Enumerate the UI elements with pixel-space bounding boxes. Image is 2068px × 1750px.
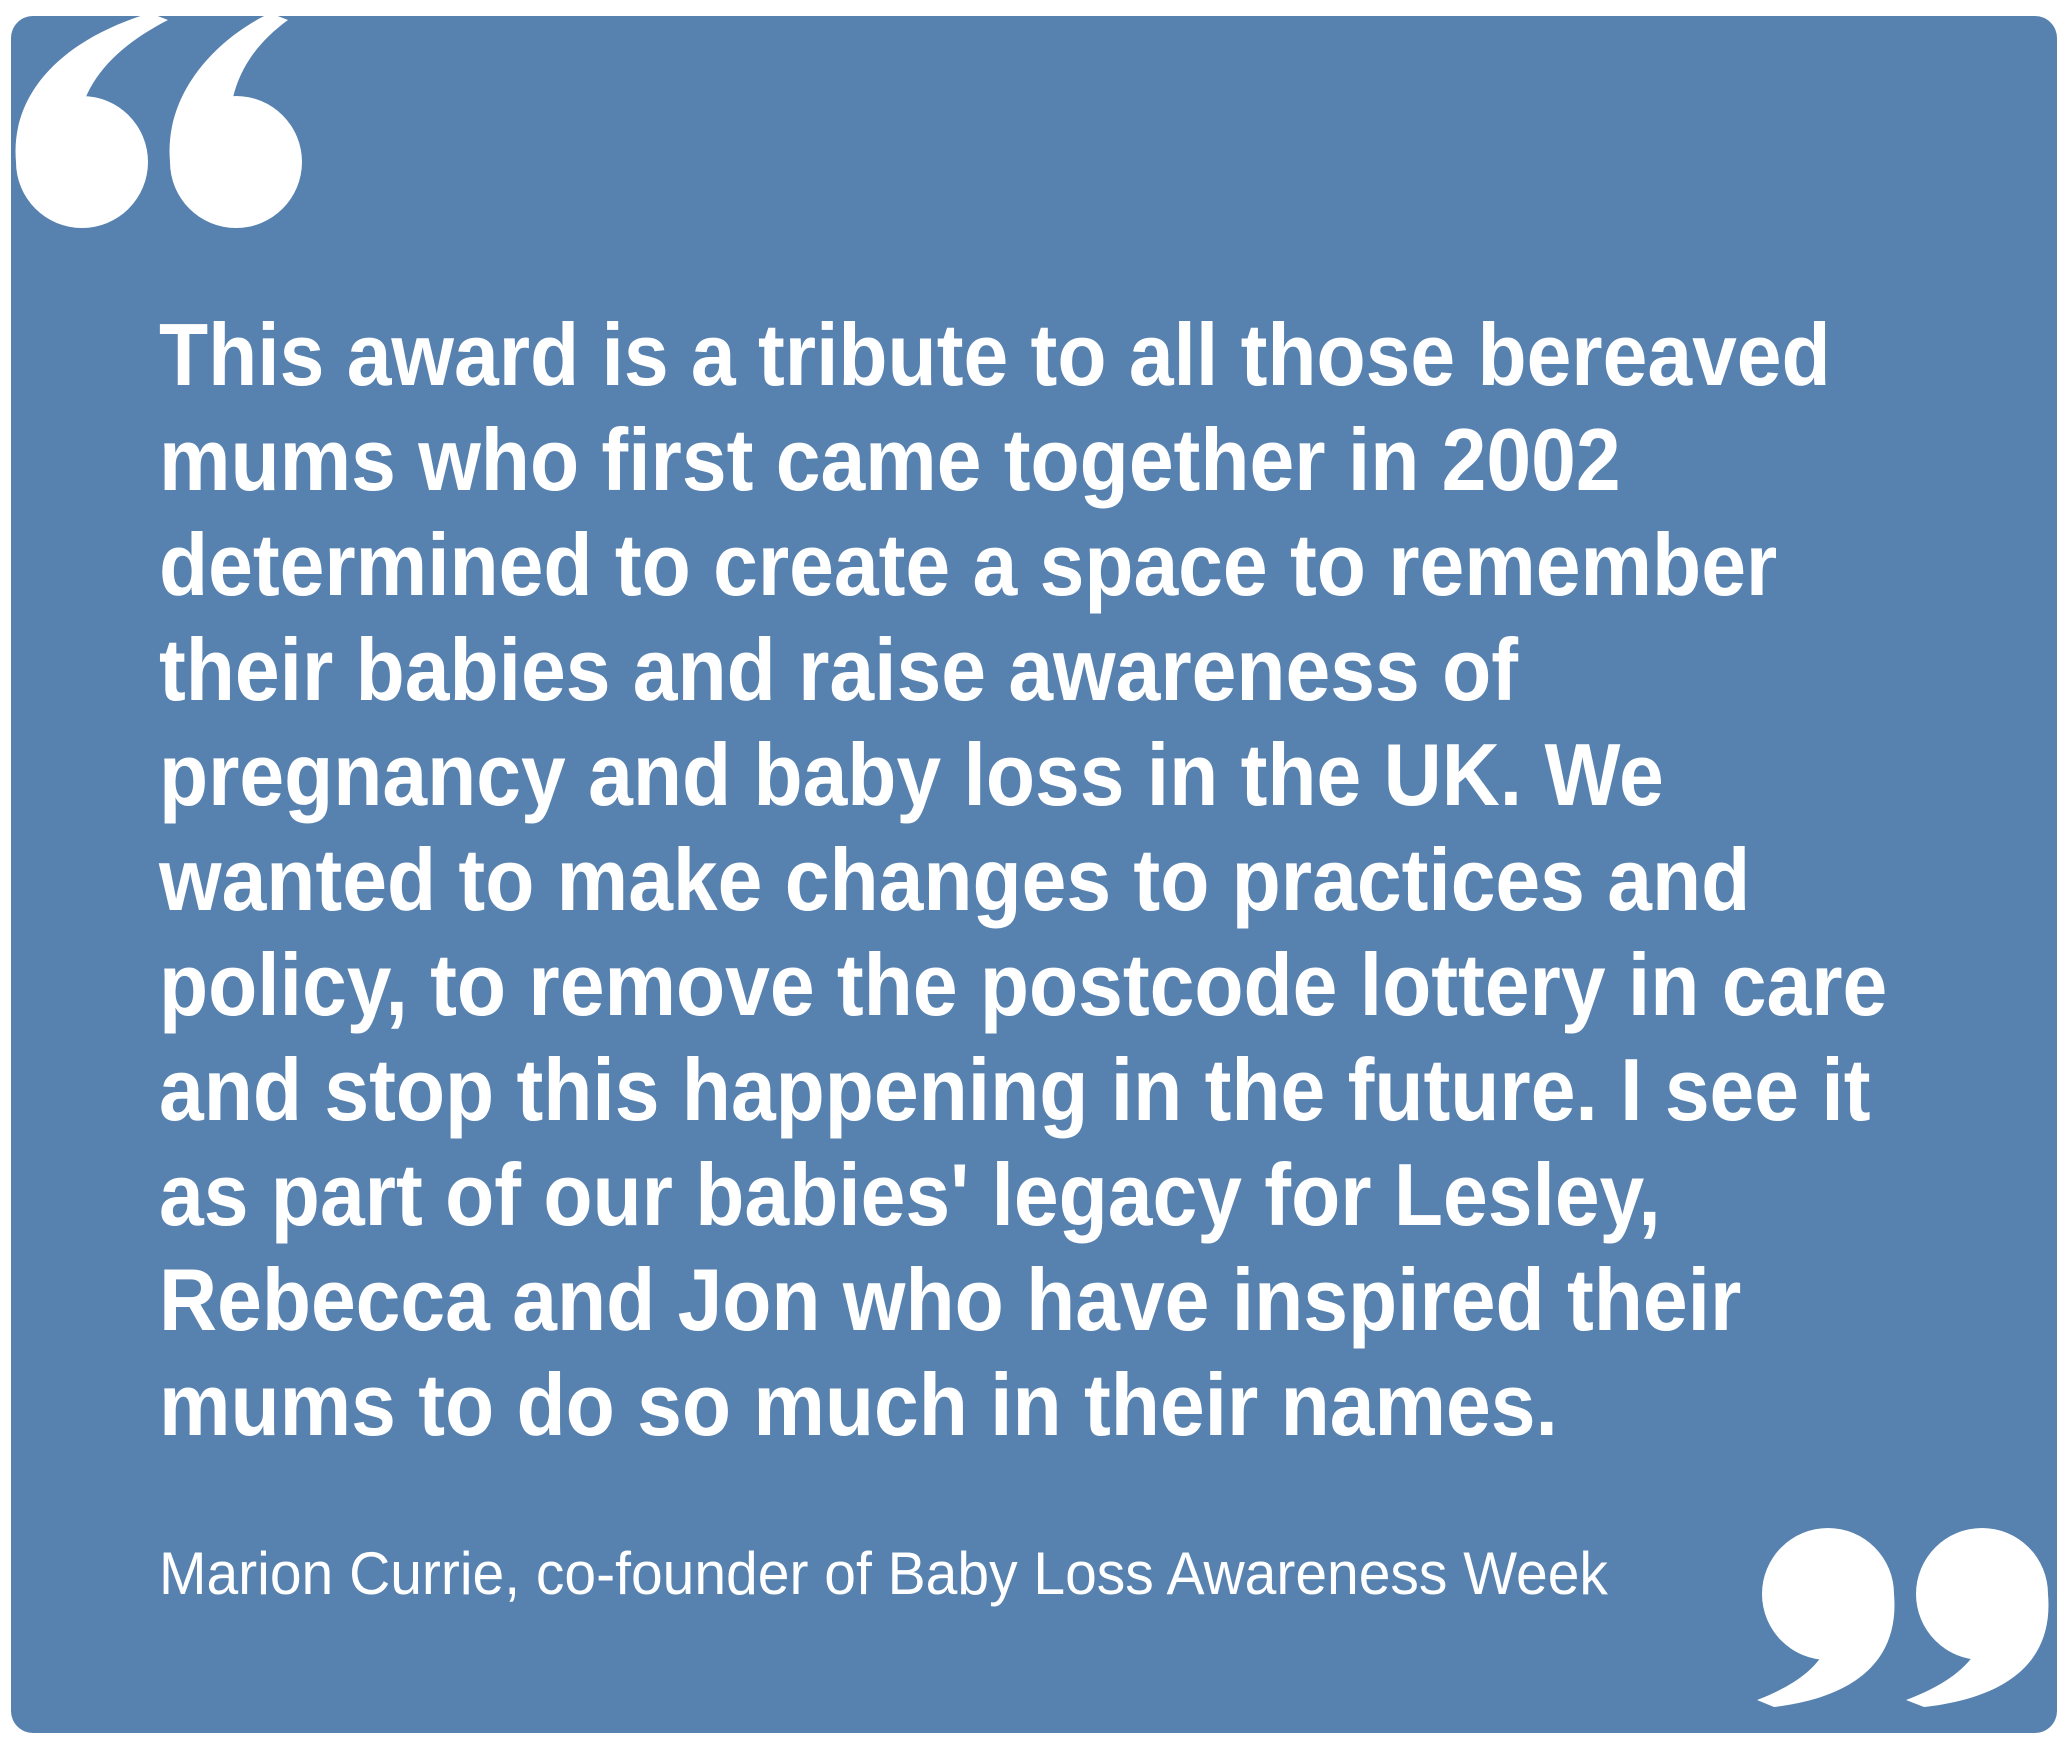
text block: quote: Rebecca and Jon who have inspired their [159,1250,1741,1349]
text block: quote: pregnancy and baby loss in the UK. We [159,725,1664,824]
text block: quote: and stop this happening in the future. I see it [159,1040,1871,1139]
text block: quote: mums to do so much in their names. [159,1355,1558,1454]
text block: quote: as part of our babies' legacy for Lesley, [159,1145,1661,1244]
text block: quote [158,305,1887,1454]
text block: quote: This award is a tribute to all those bereaved [159,305,1831,404]
text block: quote: mums who first came together in 2002 [159,410,1621,509]
text block: quote: their babies and raise awareness of [159,620,1518,719]
text block: quote: wanted to make changes to practices and [159,830,1750,929]
text block: attribution: Marion Currie, co-founder of Baby Loss Awareness Week [159,1540,1608,1607]
text block: quote: determined to create a space to remember [159,515,1777,614]
text block: quote: policy, to remove the postcode lottery in care [159,935,1887,1034]
